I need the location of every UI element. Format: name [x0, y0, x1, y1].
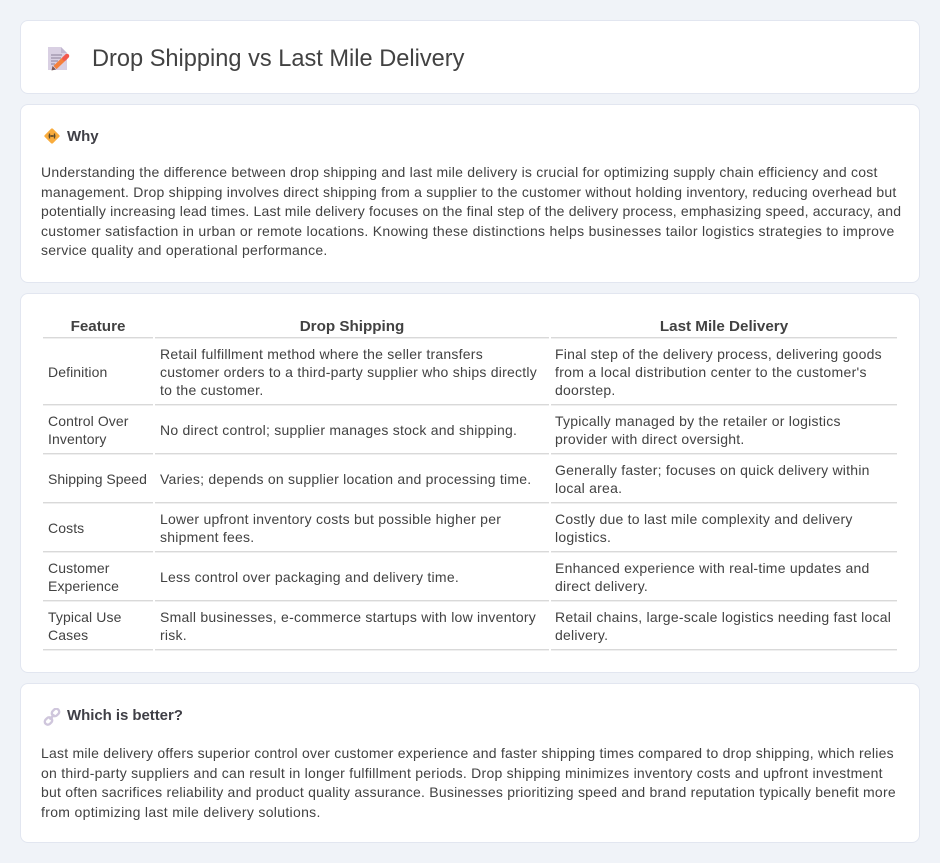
- row: typical use cases: [48, 609, 891, 643]
- row: customer experience: Experience: [48, 578, 119, 594]
- paragraph: which is better: on third-party suppliers and can result in longer fulfillment periods. Drop shipping minimizes inventory costs and upfront investment: [41, 765, 883, 781]
- table header row: [71, 318, 788, 335]
- row: typical use cases: Small businesses, e-commerce startups with low inventory: [160, 609, 536, 625]
- heading: which is better: Which is better?: [67, 707, 183, 724]
- row: shipping speed: local area.: [555, 480, 622, 496]
- row: control over inventory: Inventory: [48, 431, 106, 447]
- row: definition: [48, 346, 882, 398]
- panel: why: [20, 104, 920, 283]
- row: control over inventory: provider with direct oversight.: [555, 431, 745, 447]
- icon: warning diamond: [44, 128, 60, 144]
- row: customer experience: Customer: [48, 560, 109, 576]
- row: definition: Retail fulfillment method where the seller transfers: [160, 346, 483, 362]
- row: shipping speed: Shipping Speed: [48, 471, 147, 487]
- paragraph: which is better: Last mile delivery offers superior control over customer experience and faster shipping times compared to drop shipping, which relies: [41, 745, 894, 761]
- heading: why: Why: [67, 128, 99, 145]
- paragraph: why: Understanding the difference between drop shipping and last mile delivery is crucial for optimizing supply chain efficiency and cost: [41, 164, 878, 180]
- paragraph: why: management. Drop shipping involves direct shipping from a supplier to the customer without holding inventory, reducing overhead but: [41, 184, 897, 200]
- paragraph: which is better: from optimizing last mile delivery solutions.: [41, 804, 321, 820]
- panel: comparison table: [20, 293, 920, 673]
- table header row: Drop Shipping: [300, 318, 404, 335]
- row: definition: doorstep.: [555, 382, 616, 398]
- row: customer experience: Less control over packaging and delivery time.: [160, 569, 459, 585]
- row: definition: customer orders to a third-party supplier who ships directly: [160, 364, 537, 380]
- row: definition: Final step of the delivery process, delivering goods: [555, 346, 882, 362]
- title: Drop Shipping vs Last Mile Delivery: [92, 46, 464, 72]
- row: typical use cases: Retail chains, large-scale logistics needing fast local: [555, 609, 891, 625]
- row: shipping speed: Generally faster; focuses on quick delivery within: [555, 462, 870, 478]
- row: definition: Definition: [48, 364, 107, 380]
- paragraph: why: service quality and operational performance.: [41, 242, 328, 258]
- row: costs: Costly due to last mile complexity and delivery: [555, 511, 853, 527]
- row: definition: to the customer.: [160, 382, 263, 398]
- row: typical use cases: Typical Use: [48, 609, 121, 625]
- panel: which is better: [20, 683, 920, 843]
- row: costs: logistics.: [555, 529, 611, 545]
- row: shipping speed: Varies; depends on supplier location and processing time.: [160, 471, 531, 487]
- paragraph: which is better: [41, 745, 896, 820]
- row: shipping speed: [48, 462, 870, 496]
- row: costs: shipment fees.: [160, 529, 254, 545]
- table header row: Last Mile Delivery: [660, 318, 788, 335]
- icon: memo with pencil: [48, 47, 70, 70]
- paragraph: why: potentially increasing lead times. Last mile delivery focuses on the final step of the delivery process, emphasizing speed, accuracy, and: [41, 203, 901, 219]
- row: typical use cases: delivery.: [555, 627, 608, 643]
- row: costs: Costs: [48, 520, 84, 536]
- header panel: [20, 20, 920, 94]
- row: definition: from a local distribution center to the customer's: [555, 364, 867, 380]
- row: control over inventory: [48, 413, 841, 447]
- paragraph: why: [41, 164, 901, 258]
- row: typical use cases: Cases: [48, 627, 88, 643]
- icon: chain link: [44, 708, 60, 726]
- row: control over inventory: Typically managed by the retailer or logistics: [555, 413, 841, 429]
- paragraph: which is better: but often sacrifices reliability and product quality assurance. Businesses prioritizing speed and brand reputation typically benefit more: [41, 784, 896, 800]
- row: costs: Lower upfront inventory costs but possible higher per: [160, 511, 501, 527]
- row: customer experience: Enhanced experience with real-time updates and: [555, 560, 870, 576]
- row: typical use cases: risk.: [160, 627, 187, 643]
- row: customer experience: [48, 560, 870, 594]
- table header row: Feature: [71, 318, 125, 335]
- row: costs: [48, 511, 853, 545]
- row: control over inventory: No direct control; supplier manages stock and shipping.: [160, 422, 517, 438]
- paragraph: why: customer satisfaction in urban or remote locations. Knowing these distinctions helps businesses tailor logistics strategies to improve: [41, 223, 895, 239]
- row: customer experience: direct delivery.: [555, 578, 648, 594]
- row: control over inventory: Control Over: [48, 413, 129, 429]
